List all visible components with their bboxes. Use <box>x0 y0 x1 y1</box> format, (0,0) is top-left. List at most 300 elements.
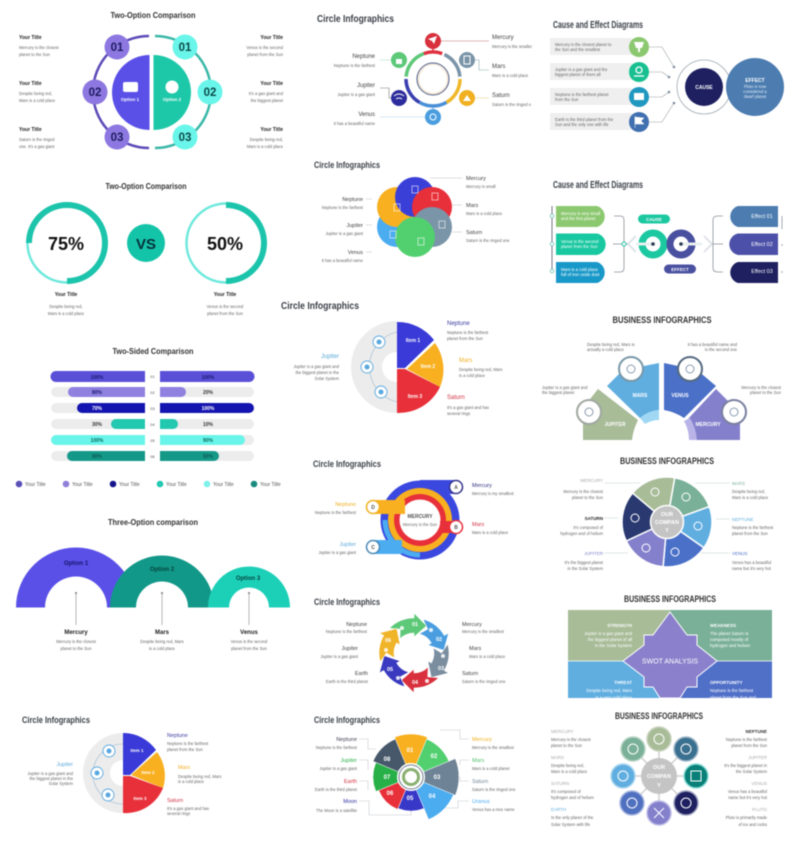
wedge item 2: Item 2 <box>141 770 155 775</box>
right labels: Mars <box>472 758 484 764</box>
left boxes: Mercury is very small <box>561 211 600 216</box>
company centre: COMPAN <box>647 774 671 780</box>
pie slices <box>373 734 459 820</box>
right labels: Saturn is the ringed o <box>492 102 532 107</box>
heading: Cause and Effect Diagrams <box>553 180 643 191</box>
slice numbers: 04 <box>429 794 436 800</box>
yellow tab: D <box>371 505 375 511</box>
left labels: hydrogen and of helium <box>560 531 604 536</box>
left labels: Venus <box>358 112 375 118</box>
right labels <box>462 622 506 684</box>
node numbers: 01 <box>111 42 124 54</box>
left label: Jupiter is a gas giant and <box>293 364 340 369</box>
jupiter sector: JUPITER <box>604 422 626 428</box>
swot texts: in the Solar System <box>595 643 632 648</box>
right texts: It's a gas giant and <box>249 91 284 96</box>
heading: BUSINESS INFOGRAPHICS <box>612 315 712 325</box>
legend: Your Title <box>119 482 140 488</box>
heading: Circle Infographics <box>314 597 380 607</box>
heading: Circle Infographics <box>313 459 381 469</box>
venus sector <box>664 363 716 418</box>
text rows <box>550 38 632 130</box>
right labels: Despite being red, Mars <box>459 367 502 372</box>
option captions: Despite being red, Mars <box>140 639 184 644</box>
bar values: 50% <box>203 454 214 460</box>
left labels: Jupiter is a gas giant <box>319 766 358 771</box>
effect circle: EFFECT <box>745 78 765 84</box>
row numbers: 01 <box>150 374 155 379</box>
node numbers: 01 <box>179 42 192 54</box>
right labels: Venus has a nice name <box>472 807 515 812</box>
right texts: the biggest planet <box>251 98 284 103</box>
right labels: Saturn <box>472 779 488 785</box>
right labels: of ice and rocks <box>738 822 767 827</box>
text rows: Mercury is the closest planet to <box>555 42 612 47</box>
right labels: It's a gas giant and has <box>447 405 489 410</box>
panel: swot analysis <box>568 594 772 700</box>
left boxes: and the first planet <box>561 216 596 221</box>
right labels: Neptune is the farthest <box>167 741 209 746</box>
right labels: Mars <box>178 765 190 771</box>
cause pill: CAUSE <box>646 217 662 222</box>
right texts: Despite being red, <box>250 137 283 142</box>
left labels: Earth <box>355 671 368 677</box>
centre circle: COMPAN <box>655 520 679 526</box>
option captions: Mercury is the closest <box>56 639 97 644</box>
right labels: planet from the Sun <box>167 747 203 752</box>
sector captions: It has a beautiful name and <box>688 342 738 347</box>
spokes <box>623 739 696 813</box>
company centre <box>641 758 677 794</box>
bar values <box>91 375 215 460</box>
right texts <box>246 35 284 149</box>
left texts: Your Title <box>19 81 42 87</box>
swot texts: OPPORTUNITY <box>710 680 743 685</box>
right texts: Your Title <box>260 81 283 87</box>
left line <box>551 206 553 272</box>
effect circle: Pluto is now <box>744 84 766 89</box>
left label <box>293 354 340 381</box>
left labels: MERCURY <box>580 478 603 483</box>
grey half donut <box>351 321 397 413</box>
right labels <box>447 321 502 416</box>
panel: circle infographic ring nodes <box>317 14 533 126</box>
red tab: B <box>454 525 458 531</box>
right labels <box>724 729 768 827</box>
centre circle: Y <box>665 528 669 534</box>
swot title: SWOT ANALYSIS <box>642 658 698 666</box>
jupiter sector <box>583 389 638 440</box>
left labels: Despite being red, <box>551 763 584 768</box>
heading: Two-Option Comparison <box>106 182 187 191</box>
right labels: Mars is a cold place <box>472 530 509 535</box>
left labels: in the Solar System <box>568 566 604 571</box>
bar values: 20% <box>203 390 214 396</box>
slice numbers: 05 <box>407 796 414 802</box>
left labels: JUPITER <box>584 551 604 556</box>
cause ring <box>677 60 731 114</box>
swot texts: is a very cold place <box>595 695 633 700</box>
panel: circle infographic half pie bottom <box>22 715 221 816</box>
segment icons <box>631 488 702 556</box>
panel: circle infographic eight-slice pie <box>314 715 516 820</box>
left labels: It's composed of <box>551 789 582 794</box>
swot texts: THREAT <box>614 680 632 685</box>
left boxes: Venus is the second <box>561 239 599 244</box>
left labels <box>334 54 376 126</box>
mars sector: MARS <box>633 393 648 399</box>
sector captions: is the second one <box>705 347 738 352</box>
wedge item 2: Item 2 <box>421 364 435 370</box>
wedge item 3 <box>397 369 440 413</box>
right boxes <box>729 206 778 283</box>
slice numbers: 07 <box>384 775 391 781</box>
central rings <box>622 233 712 255</box>
swot quadrants <box>568 610 772 698</box>
captions: Venus is the second <box>207 304 244 309</box>
row numbers: 05 <box>150 438 155 443</box>
left boxes: Mars is a cold place <box>561 267 599 272</box>
left label: Jupiter <box>56 762 73 768</box>
right labels <box>472 737 516 812</box>
left labels: SATURN <box>585 516 603 521</box>
option captions: planet to the Sun <box>61 646 92 651</box>
option 2 half circle <box>154 55 191 130</box>
left labels: Earth <box>344 779 357 785</box>
sector captions <box>542 342 782 395</box>
left labels: It's the biggest planet <box>564 560 604 565</box>
option captions: planet from the Sun <box>231 646 268 651</box>
left labels: It has a beautiful name <box>334 121 376 126</box>
left labels: Neptune is the farthest <box>315 510 357 515</box>
75 percent donut <box>28 204 106 282</box>
centre label: Mercury is the Sun <box>403 522 438 527</box>
left labels: Moon <box>343 799 357 805</box>
swot texts: Despite being red, Mars <box>586 688 632 693</box>
left labels <box>551 729 594 827</box>
right labels <box>492 35 533 107</box>
wedge item 1 <box>123 733 156 775</box>
right labels: Mercury is small <box>466 184 496 189</box>
left texts: one. It's a gas giant <box>19 144 55 149</box>
bar values: 100% <box>91 438 104 444</box>
row numbers: 04 <box>150 422 155 427</box>
node numbers: 02 <box>89 87 101 99</box>
heading: BUSINESS INFOGRAPHICS <box>620 456 714 466</box>
left labels: The Moon is a satellite <box>316 808 358 813</box>
right labels: NEPTUNE <box>732 517 754 522</box>
right labels: Venus has a beautiful <box>732 560 771 565</box>
right labels: name but it's very hot <box>732 566 772 571</box>
right labels: planet from the Sun <box>731 743 768 748</box>
connector lines <box>359 730 469 815</box>
option captions: Mercury <box>64 630 88 636</box>
venus sector: VENUS <box>671 393 689 399</box>
grey half donut <box>83 733 123 813</box>
heading: Three-Option comparison <box>108 518 198 527</box>
right labels: Neptune is the farthest <box>447 330 489 335</box>
effect pill: EFFECT <box>671 267 689 272</box>
right labels: Saturn <box>492 93 510 99</box>
right labels: Mercury <box>492 35 514 41</box>
swot texts: Neptune is the farthest <box>710 688 754 693</box>
heading: Two-Sided Comparison <box>112 347 194 356</box>
option 2 half circle: Option 2 <box>163 97 182 102</box>
left texts: Mercury is the closest <box>19 45 59 50</box>
left bars <box>50 371 145 461</box>
sector captions: Jupiter is a gas giant and <box>542 385 588 390</box>
right texts: Your Title <box>260 35 283 41</box>
left labels: Mars is a cold place <box>551 769 588 774</box>
wedge item 3: Item 3 <box>408 394 422 400</box>
panel: three-option comparison <box>16 518 290 651</box>
row numbers: 06 <box>150 454 155 459</box>
left labels: Neptune <box>335 502 356 508</box>
right labels: Despite being red, <box>732 489 765 494</box>
right labels: Mercury is my smallest <box>472 491 514 496</box>
wedge item 3: Item 3 <box>133 796 147 801</box>
left labels: Earth is the third planet <box>326 679 369 684</box>
right labels: Mars <box>472 522 484 528</box>
right labels: MARS <box>732 481 745 486</box>
right labels <box>732 481 774 571</box>
effect circle <box>726 58 784 116</box>
left label: Solar System <box>49 781 74 786</box>
icon glyphs <box>585 365 738 416</box>
connector lines <box>366 178 462 252</box>
left labels: Mercury is the closest <box>563 489 604 494</box>
panel: business infographics wheel <box>560 456 774 571</box>
left labels: Neptune <box>352 54 376 60</box>
captions <box>48 292 244 316</box>
right labels: planet from the Sun <box>732 531 768 536</box>
centre circle <box>650 506 684 538</box>
vs badge: VS <box>136 236 156 253</box>
right labels: Neptune is the farthest <box>732 525 774 530</box>
heading: Two-Option Comparison <box>110 11 196 20</box>
panel: our company spokes <box>551 711 768 827</box>
right labels: Uranus <box>472 799 490 805</box>
right labels: Despite being red, Mars <box>178 774 221 779</box>
left labels: Jupiter is a gas giant <box>318 550 357 555</box>
left labels: It has a beautiful name <box>322 258 364 263</box>
left texts: Despite being red, <box>19 91 52 96</box>
left labels: Jupiter is a gas giant <box>320 654 359 659</box>
wedge item 2 <box>131 752 165 788</box>
row numbers: 02 <box>150 390 155 395</box>
legend <box>16 481 281 488</box>
yellow tab <box>366 500 405 514</box>
legend: Your Title <box>72 482 93 488</box>
left labels: Jupiter <box>341 646 358 652</box>
right labels <box>472 483 514 535</box>
pointer lines <box>75 592 250 625</box>
option labels: Option 2 <box>150 567 175 573</box>
right labels: It's the biggest planet in <box>724 763 768 768</box>
legend: Your Title <box>25 482 46 488</box>
left labels: MARS <box>551 755 564 760</box>
centre circle: OUR <box>661 512 673 518</box>
option captions: Venus is the second <box>231 639 268 644</box>
right labels: Mars is a cold place <box>469 654 506 659</box>
right labels: the Solar System <box>736 769 768 774</box>
panel: two-sided comparison <box>16 347 281 488</box>
right labels: Neptune <box>167 733 188 739</box>
option captions <box>56 630 268 651</box>
panel: circle infographic arrows <box>314 597 506 694</box>
left labels <box>320 622 369 684</box>
slice numbers <box>384 748 441 802</box>
right labels: Mercury is the smaller <box>492 44 533 49</box>
left labels: planet to the Sun <box>551 743 583 748</box>
connectors <box>649 47 674 122</box>
icon chain <box>361 332 397 402</box>
right boxes: Effect 02 <box>751 242 773 248</box>
right labels: Mars is a cold place <box>732 495 769 500</box>
option captions: Mars <box>155 630 170 636</box>
node numbers: 02 <box>204 87 216 99</box>
icon nodes <box>391 33 475 125</box>
slice numbers: 03 <box>434 775 441 781</box>
node numbers <box>89 42 216 144</box>
sector captions: actually a cold place <box>587 347 625 352</box>
right bars <box>160 371 254 461</box>
right labels: Mercury <box>466 176 486 182</box>
ring segments <box>406 52 460 106</box>
text rows: the Sun and the smallest <box>555 47 601 52</box>
slice numbers: 01 <box>407 748 414 754</box>
panel: two-option percent comparison <box>28 182 266 316</box>
overlapping petals <box>377 177 452 257</box>
left labels: It's composed of <box>573 525 604 530</box>
captions: Your Title <box>214 292 237 298</box>
swot texts: The planet Saturn is <box>710 631 748 636</box>
left labels: Venus <box>348 250 363 256</box>
wedge item 2 <box>407 343 443 387</box>
panel: business infographics fan <box>542 315 782 440</box>
right labels: Saturn <box>462 671 478 677</box>
right labels: JUPITER <box>748 755 768 760</box>
bar values: 100% <box>202 406 215 412</box>
left labels: Neptune is the farthest <box>326 629 368 634</box>
right labels <box>466 176 510 243</box>
left boxes: full of iron oxide dust <box>561 272 600 277</box>
arch option 2 <box>110 556 214 608</box>
swot texts: STRENGTH <box>607 623 632 628</box>
left number nodes <box>82 34 130 150</box>
left labels: Jupiter <box>339 542 356 548</box>
arch option 3 <box>208 566 290 608</box>
legend: Your Title <box>260 482 281 488</box>
panel: cause and effect flow <box>550 180 782 283</box>
left bracket <box>613 216 628 272</box>
legend: Your Title <box>166 482 187 488</box>
left labels: Jupiter is a gas giant <box>337 92 376 97</box>
left texts: Mars is a cold place <box>19 98 56 103</box>
left texts: Your Title <box>19 35 42 41</box>
right labels: Neptune is the farthest <box>726 737 768 742</box>
bar values: 100% <box>202 375 215 381</box>
sector captions: Mercury is the closest <box>741 385 782 390</box>
option labels: Option 1 <box>64 561 89 567</box>
heading: BUSINESS INFOGRAPHICS <box>624 594 716 604</box>
left label: Solar System <box>315 376 340 381</box>
right labels: Mercury <box>472 737 492 743</box>
left labels <box>315 502 357 555</box>
right labels: Mars is a cold planet <box>472 766 510 771</box>
option labels <box>64 561 261 582</box>
text rows: Sun and the only one with life <box>555 122 609 127</box>
top blue tab <box>420 480 462 494</box>
option 1 half circle: Option 1 <box>121 97 140 102</box>
panel: circle infographic half pie <box>281 301 502 416</box>
right texts: Your Title <box>260 127 283 133</box>
right boxes: Effect 03 <box>751 269 773 275</box>
centre ring <box>398 764 424 790</box>
left labels: Neptune <box>336 737 357 743</box>
left labels: Jupiter <box>340 758 357 764</box>
light blue tab <box>366 540 402 554</box>
wheel segments <box>622 477 712 567</box>
arrow numbers <box>385 622 444 686</box>
right labels: Mercury is the smallest <box>462 629 505 634</box>
effect circle: considered a <box>743 89 767 94</box>
left texts: planet to the Sun <box>19 52 51 57</box>
circular arrows <box>367 612 461 694</box>
heading: Circle Infographics <box>281 301 359 312</box>
swot texts: Jupiter is a gas giant and <box>584 631 633 636</box>
left labels: Neptune <box>342 197 363 203</box>
right labels: Mars is a cold place <box>492 73 529 78</box>
captions: planet from the Sun <box>207 311 244 316</box>
right labels: Mercury <box>472 483 492 489</box>
icon circles <box>629 37 649 132</box>
heading: Circle Infographics <box>22 715 90 725</box>
bar values: 30% <box>92 422 103 428</box>
option captions: Venus <box>240 630 258 636</box>
satellite icons <box>618 734 701 818</box>
75 percent donut: 75% <box>48 234 84 254</box>
right number nodes <box>172 34 222 150</box>
left labels: Mercury is the closest <box>551 737 591 742</box>
sector captions: planet to the Sun <box>750 390 782 395</box>
left labels: Neptune is the farthest <box>316 745 358 750</box>
top blue tab: A <box>454 485 458 491</box>
left labels: Jupiter <box>346 223 363 229</box>
concentric rings <box>380 480 460 560</box>
left texts: Saturn is the ringed <box>19 137 55 142</box>
right labels: It's a gas giant and has <box>167 806 209 811</box>
panel: circle infographic flower <box>314 160 510 263</box>
connector dots <box>668 66 675 104</box>
option labels: Option 3 <box>236 576 261 582</box>
arrow numbers: 04 <box>412 680 419 686</box>
slice numbers: 02 <box>431 754 438 760</box>
heading: BUSINESS INFOGRAPHICS <box>615 711 703 721</box>
node numbers: 03 <box>179 132 191 144</box>
right labels: Saturn <box>466 230 482 236</box>
left labels: Neptune is the farthest <box>322 205 364 210</box>
arrow icons <box>384 626 445 683</box>
left labels: Jupiter is a gas giant <box>325 231 364 236</box>
centre label: MERCURY <box>407 514 433 520</box>
swot arrows <box>623 612 717 698</box>
right labels: several rings <box>447 411 470 416</box>
arrow numbers: 01 <box>412 622 418 628</box>
arrow numbers: 06 <box>385 638 391 644</box>
text rows: from the Sun <box>555 97 579 102</box>
bar values: 90% <box>203 438 214 444</box>
